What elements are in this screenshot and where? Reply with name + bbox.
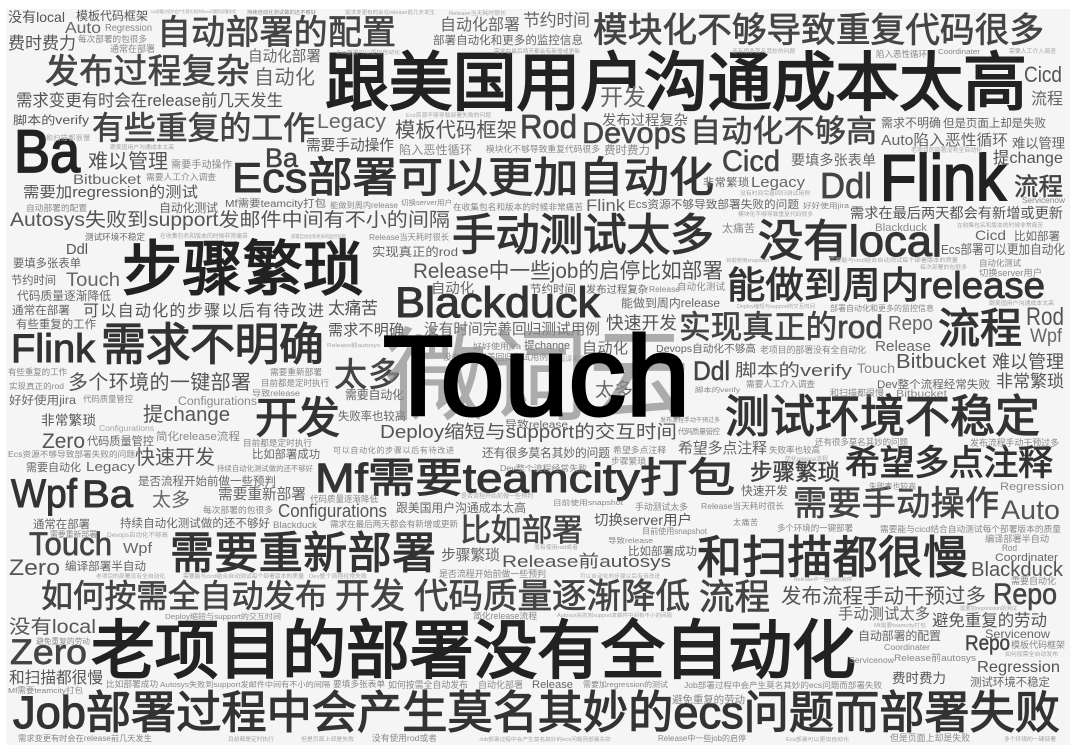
small keywords: Configurations bbox=[99, 424, 154, 433]
word: Cicd: Cicd bbox=[722, 145, 780, 178]
small keywords: 模块化不够导致重复代码很多 bbox=[486, 143, 600, 154]
small keywords: Ecs资源不够导致部署失败的问题 bbox=[8, 449, 135, 459]
small keywords: 好好使用jira bbox=[9, 393, 77, 407]
small keywords: 需要自动化 bbox=[345, 388, 404, 402]
small keywords: Mf需要teamcity打包 bbox=[225, 197, 326, 210]
small keywords: Coordinater bbox=[938, 49, 981, 56]
small keywords: Wpf bbox=[123, 540, 153, 557]
small keywords: 自动化测试 bbox=[979, 258, 1021, 268]
word: 没有local: 没有local bbox=[758, 217, 942, 266]
small keywords: 老项目的部署没有全自动化 bbox=[96, 572, 165, 580]
word: Ba lower: Ba bbox=[82, 474, 134, 516]
small keywords: 实现真正的rod bbox=[9, 381, 64, 391]
small keywords: 快速开发 bbox=[741, 484, 788, 498]
small keywords: 提change bbox=[993, 149, 1063, 167]
small keywords: 希望多点注释 bbox=[678, 440, 767, 457]
word: 老项目的部署没有全自动化: 老项目的部署没有全自动化 bbox=[91, 615, 856, 687]
small keywords: 切换server用户 bbox=[594, 512, 692, 528]
small keywords: Ecs资源不够导致部署失败的问题 bbox=[628, 197, 799, 211]
small keywords: 希望多点注释 bbox=[613, 444, 666, 455]
small keywords: 节约时间 bbox=[11, 273, 56, 287]
small keywords: 需求不明确 bbox=[328, 322, 404, 339]
small keywords: Servicenow bbox=[985, 627, 1050, 641]
small keywords: 发布流程手动干预过多 bbox=[970, 437, 1059, 448]
small keywords: 难以管理 bbox=[1012, 136, 1065, 151]
small keywords: 多个环境的一键部署 bbox=[68, 371, 251, 394]
small keywords: 没有使用rod或者 bbox=[372, 733, 437, 743]
small keywords: 发布流程手动干预过多 bbox=[781, 585, 986, 608]
small keywords: 陷入恶性循环 bbox=[876, 49, 927, 59]
small keywords: 需要加regression的测试 bbox=[23, 184, 198, 201]
small keywords: 跟美国用户沟通成本太高 bbox=[110, 143, 174, 151]
small keywords: Touch bbox=[66, 270, 120, 291]
word: 和扫描都很慢: 和扫描都很慢 bbox=[697, 532, 968, 583]
word: Touch center: Touch bbox=[383, 313, 690, 439]
small keywords: 流程 bbox=[1014, 173, 1063, 201]
small keywords: Ba bbox=[265, 143, 299, 173]
small keywords: 部署自动化和更多的监控信息 bbox=[291, 233, 346, 240]
small keywords: 费时费力 bbox=[604, 144, 650, 157]
word: Ba: Ba bbox=[14, 118, 81, 185]
word: Flink: Flink bbox=[880, 141, 1006, 214]
small keywords: 但是页面上却是失败 bbox=[301, 735, 354, 743]
word: Ddl: Ddl bbox=[820, 165, 872, 206]
watermark: 微词云: 微词云 bbox=[385, 320, 690, 434]
small keywords: 自动化 bbox=[582, 340, 628, 357]
small keywords: 快速开发 bbox=[606, 313, 677, 333]
small keywords: 模板代码框架 bbox=[395, 119, 517, 142]
small keywords: Ddl bbox=[66, 241, 88, 258]
small keywords: 在收集包名和版本的时候非常痛苦 bbox=[160, 232, 248, 240]
small keywords: 和扫描都很慢 bbox=[9, 669, 103, 687]
small keywords: 需要自动化 bbox=[1011, 575, 1056, 586]
small keywords: Deploy缩短与support的交互时间 bbox=[165, 611, 281, 621]
small keywords: 自动化测试 bbox=[159, 200, 218, 215]
word: Devops: Devops bbox=[582, 117, 686, 150]
small keywords: 没有时间完善回归测试用例 bbox=[424, 321, 600, 338]
small keywords: 失败率也较高 bbox=[338, 409, 406, 423]
small keywords: 步骤繁琐 bbox=[441, 546, 500, 564]
small keywords: 没有local bbox=[8, 9, 65, 25]
small keywords: Legacy bbox=[317, 111, 386, 133]
small keywords: 持续自动化测试做的还不够好 bbox=[217, 464, 314, 473]
small keywords: Release bbox=[649, 285, 681, 294]
small keywords: 手动测试太多 bbox=[635, 501, 688, 512]
small keywords: Deploy缩短与support的交互时间 bbox=[380, 422, 677, 442]
small keywords: Devops自动化不够高 bbox=[107, 531, 168, 539]
small keywords: Autosys失败到support发邮件中间有不小的间隔 bbox=[557, 611, 672, 619]
small keywords: 节约时间 bbox=[530, 282, 576, 296]
small keywords: 模板代码框架 bbox=[1011, 639, 1065, 650]
small keywords: 有些重复的工作 bbox=[16, 317, 96, 331]
small keywords: 太多 bbox=[152, 489, 190, 511]
small keywords: 代码质量逐渐降低 bbox=[310, 494, 378, 504]
small keywords: 代码质量逐渐降低 bbox=[17, 289, 111, 303]
small keywords: 需要加regression的测试 bbox=[960, 605, 1017, 612]
small keywords: Ecs资源不够导致部署失败的问题 bbox=[406, 111, 492, 119]
word: 自动化不够高: 自动化不够高 bbox=[690, 114, 877, 149]
word: 比如部署: 比如部署 bbox=[460, 513, 583, 548]
small keywords: 自动化测试 bbox=[677, 281, 725, 293]
word: 希望多点注释: 希望多点注释 bbox=[845, 444, 1053, 483]
small keywords: Servicenow bbox=[1022, 196, 1065, 205]
small keywords: Blackduck bbox=[875, 222, 928, 234]
small keywords: Repo bbox=[965, 632, 1010, 655]
small keywords: 需要重新部署 bbox=[50, 529, 97, 539]
word: Wpf: Wpf bbox=[11, 472, 78, 516]
word: Repo: Repo bbox=[993, 578, 1057, 611]
small keywords: Bitbucket bbox=[73, 171, 141, 187]
small keywords: 每次部署的包很多 bbox=[203, 504, 273, 515]
small keywords: 目前都是定时执行 bbox=[243, 437, 312, 448]
small keywords: 要填多张表单 bbox=[13, 256, 81, 270]
small keywords: 手动测试太多 bbox=[838, 606, 930, 623]
small keywords: 还有很多莫名其妙的问题 bbox=[482, 446, 610, 460]
word: 需要重新部署: 需要重新部署 bbox=[170, 529, 436, 578]
small keywords: Cicd bbox=[1024, 62, 1062, 87]
small keywords: Deploy缩短与support的交互时间 bbox=[737, 303, 815, 310]
small keywords: 避免重复的劳动 bbox=[672, 693, 745, 706]
small keywords: 在收集包名和版本的时候非常痛苦 bbox=[957, 221, 1043, 229]
small keywords: 没有时间完善回归测试用例 bbox=[740, 189, 810, 197]
small keywords: Coordinater bbox=[995, 552, 1058, 564]
small keywords: 要填多张表单 bbox=[791, 152, 876, 168]
small keywords: 发布过程复杂 bbox=[586, 283, 648, 296]
word: 步骤繁琐: 步骤繁琐 bbox=[122, 236, 363, 303]
small keywords: 难以管理 bbox=[88, 150, 168, 173]
word: 流程: 流程 bbox=[938, 305, 1022, 352]
small keywords: Release中一些job的启停 bbox=[794, 575, 852, 583]
small keywords: 需要自动化 bbox=[26, 460, 81, 474]
small keywords: 需求在最后两天都会有新增或更新 bbox=[494, 47, 580, 55]
small keywords: Touch bbox=[857, 360, 895, 376]
word: 手动测试太多: 手动测试太多 bbox=[452, 211, 714, 260]
small keywords: 可以自动化的步骤以后有待改进 bbox=[333, 445, 454, 455]
small keywords: 切换server用户 bbox=[401, 198, 452, 207]
small keywords: 自动化部署 bbox=[248, 48, 321, 65]
small keywords: 部署自动化和更多的监控信息 bbox=[830, 303, 934, 313]
small keywords: Dev整个流程经常失败 bbox=[500, 463, 587, 473]
word: 模块化不够导致重复代码很多: 模块化不够导致重复代码很多 bbox=[593, 11, 1044, 50]
small keywords: 导致release bbox=[505, 418, 569, 431]
small keywords: 导致release bbox=[252, 388, 301, 398]
small keywords: 要填多张表单 bbox=[333, 678, 385, 689]
small keywords: 简化release流程 bbox=[156, 429, 240, 443]
small keywords: Regression bbox=[1000, 481, 1064, 493]
small keywords: 实现真正的rod bbox=[372, 244, 458, 259]
small keywords: Dev整个流程经常失败 bbox=[877, 377, 990, 391]
word: Mf需要teamcity打包: Mf需要teamcity打包 bbox=[315, 455, 735, 501]
small keywords: Blackduck bbox=[971, 559, 1064, 581]
small keywords: 没有local bbox=[9, 616, 96, 638]
small keywords: 比如部署成功 bbox=[252, 447, 320, 461]
word: 能做到周内release: 能做到周内release bbox=[727, 265, 1045, 306]
small keywords: 脚本的verify bbox=[695, 385, 741, 394]
small keywords: 但是页面上却是失败 bbox=[943, 116, 1046, 130]
small keywords: Auto bbox=[1001, 495, 1060, 525]
small keywords: 多个环境的一键部署 bbox=[777, 523, 853, 533]
small keywords: Repo bbox=[888, 313, 933, 335]
small keywords: Configurations bbox=[178, 396, 257, 408]
small keywords: 需要能与cicd结合自动测试每个部署版本的质量 bbox=[880, 524, 1061, 534]
small keywords: 老项目的部署没有全自动化 bbox=[760, 344, 866, 355]
word: 开发: 开发 bbox=[255, 395, 340, 443]
small keywords: 流程 bbox=[1031, 90, 1063, 108]
small keywords: 模块化不够导致重复代码很多 bbox=[738, 210, 813, 218]
small keywords: 导致release bbox=[608, 535, 653, 545]
small keywords: 目前使用snapshot bbox=[642, 526, 708, 536]
small keywords: 是否流程开始前做一些预判 bbox=[439, 568, 546, 579]
small keywords: Flink bbox=[586, 196, 626, 215]
small keywords: 自动部署的配置 bbox=[26, 202, 87, 213]
small keywords: 和扫描都很慢 bbox=[46, 133, 90, 142]
small keywords: Release当天耗时很长 bbox=[449, 9, 507, 17]
small keywords: Mf需要teamcity打包 bbox=[8, 685, 83, 695]
small keywords: 比如部署成功 bbox=[106, 678, 158, 689]
small keywords: 太痛苦 bbox=[722, 221, 755, 235]
small keywords: 编译部署半自动 bbox=[985, 533, 1049, 544]
small keywords: Release前autosys bbox=[894, 652, 977, 663]
small keywords: 可以自动化的步骤以后有待改进 bbox=[580, 572, 661, 580]
small keywords: 需要手动操作 bbox=[306, 137, 394, 154]
small keywords: Autosys失败到support发邮件中间有不小的间隔 bbox=[160, 679, 331, 689]
small keywords: 需求变更有时会在release前几天发生 bbox=[18, 733, 152, 743]
small keywords: Legacy bbox=[86, 459, 136, 474]
word: 代码质量逐渐降低: 代码质量逐渐降低 bbox=[414, 578, 690, 616]
word: 需要手动操作: 需要手动操作 bbox=[793, 485, 999, 523]
small keywords: 需求变更有时会在release前几天发生 bbox=[345, 9, 435, 16]
small keywords: 目前都是定时执行 bbox=[228, 735, 274, 743]
small keywords: 每次部署的包很多 bbox=[920, 263, 967, 271]
small keywords: Rod bbox=[1002, 543, 1017, 553]
word: 有些重复的工作: 有些重复的工作 bbox=[92, 110, 315, 146]
small keywords: 有些重复的工作 bbox=[8, 367, 67, 377]
small keywords: 比如部署 bbox=[1014, 229, 1060, 243]
small keywords: 比如部署成功 bbox=[628, 544, 697, 558]
small keywords: Blackduck bbox=[273, 520, 318, 530]
small keywords: Job部署过程中会产生莫名其妙的ecs问题而部署失败 bbox=[150, 8, 236, 14]
small keywords: 可以自动化的步骤以后有待改进 bbox=[83, 302, 324, 320]
small keywords: 好好使用jira bbox=[803, 201, 849, 210]
small keywords: Release中一些job的启停比如部署 bbox=[413, 260, 723, 283]
word: 如何按需全自动发布: 如何按需全自动发布 bbox=[41, 578, 327, 614]
small keywords: Release当天耗时很长 bbox=[701, 501, 785, 511]
small keywords: 没有使用rod或者 bbox=[534, 543, 579, 551]
small keywords: 节约时间 bbox=[523, 11, 590, 30]
small keywords: 需要人工介入调查 bbox=[746, 378, 815, 389]
small keywords: 持续自动化测试做的还不够好 bbox=[247, 8, 317, 16]
small keywords: 如何按需全自动发布 bbox=[1005, 650, 1058, 658]
word: 测试环境不稳定: 测试环境不稳定 bbox=[725, 391, 1040, 442]
small keywords: 脚本的verify bbox=[13, 113, 89, 127]
small keywords: 需要手动操作 bbox=[171, 158, 232, 171]
word: Touch left: Touch bbox=[29, 526, 112, 562]
small keywords: 需要能与cicd结合自动测试每个部署版本的质量 bbox=[183, 572, 305, 580]
small keywords: Release前autosys bbox=[327, 341, 380, 349]
small keywords: 需求变更有时会在release前几天发生 bbox=[16, 91, 283, 110]
small keywords: 自动化部署 bbox=[478, 679, 523, 690]
small keywords: Bitbucket bbox=[896, 351, 986, 373]
small keywords: Zero bbox=[42, 430, 85, 453]
small keywords: 没有时间完善回归测试用例 bbox=[443, 351, 548, 362]
small keywords: 避免重复的劳动 bbox=[36, 636, 90, 646]
small keywords: 编译部署半自动 bbox=[558, 354, 608, 363]
small keywords: Rod bbox=[520, 108, 577, 145]
small keywords: 需要重新部署 bbox=[270, 366, 322, 377]
small keywords: 能做到周内release bbox=[330, 200, 399, 210]
small keywords: 目前使用snapshot bbox=[726, 257, 770, 264]
small keywords: Release bbox=[875, 338, 931, 355]
small keywords: 模板代码框架 bbox=[76, 9, 148, 23]
small keywords: 每次部署的包很多 bbox=[78, 33, 147, 44]
small keywords: 难以管理 bbox=[992, 352, 1064, 372]
small keywords: 通常在部署 bbox=[110, 43, 155, 54]
small keywords: 提change bbox=[524, 339, 570, 352]
small keywords: 快速开发 bbox=[135, 446, 215, 469]
small keywords: 需要重新部署 bbox=[218, 486, 306, 503]
small keywords: Job部署过程中会产生莫名其妙的ecs问题而部署失败 bbox=[479, 736, 611, 743]
small keywords: Mf需要teamcity打包 bbox=[874, 622, 926, 629]
small keywords: Autosys失败到support发邮件中间有不小的间隔 bbox=[10, 209, 450, 231]
small keywords: 失败率也较高 bbox=[869, 481, 916, 491]
small keywords: 好好使用jira bbox=[473, 341, 522, 351]
small keywords: 避免重复的劳动 bbox=[932, 612, 1047, 630]
small keywords: 自动部署的配置 bbox=[858, 628, 941, 643]
small keywords: 目前使用snapshot bbox=[553, 498, 623, 507]
small keywords: 但是页面上却是失败 bbox=[890, 732, 970, 743]
small keywords: 多个环境的一键部署 bbox=[1004, 735, 1056, 743]
small keywords: 太痛苦 bbox=[733, 517, 758, 527]
small keywords: 通常在部署 bbox=[33, 517, 90, 531]
small keywords: Release bbox=[532, 679, 573, 691]
word: Zero: Zero bbox=[10, 633, 87, 672]
small keywords: 是否流程开始前做一些预判 bbox=[138, 474, 276, 488]
word: Flink left: Flink bbox=[11, 327, 96, 371]
small keywords: 非常繁琐 bbox=[703, 175, 749, 189]
small keywords: Cicd bbox=[975, 227, 1006, 243]
small keywords: 自动化部署 bbox=[440, 16, 520, 34]
small keywords: Release前autosys bbox=[502, 552, 671, 571]
small keywords: 需求在最后两天都会有新增或更新 bbox=[330, 518, 458, 529]
small keywords: 还有很多莫名其妙的问题 bbox=[732, 47, 795, 55]
small keywords: 通常在部署 bbox=[12, 303, 70, 317]
small keywords: Ecs部署可以更加自动化 bbox=[941, 242, 1065, 257]
word: 发布过程复杂: 发布过程复杂 bbox=[45, 53, 250, 91]
small keywords: Bitbucket bbox=[896, 389, 947, 400]
word: 跟美国用户沟通成本太高: 跟美国用户沟通成本太高 bbox=[325, 47, 1027, 119]
small keywords: Servicenow bbox=[849, 656, 894, 665]
small keywords: Zero bbox=[9, 555, 60, 580]
small keywords: Coordinater bbox=[884, 643, 930, 652]
word: 太多: 太多 bbox=[334, 356, 401, 393]
small keywords: 开发 bbox=[600, 84, 646, 110]
small keywords: 脚本的verify bbox=[735, 361, 853, 380]
small keywords: 在收集包名和版本的时候非常痛苦 bbox=[453, 201, 583, 212]
small keywords: Auto陷入恶性循环 bbox=[881, 132, 1008, 149]
small keywords: 需求不明确 bbox=[881, 116, 941, 130]
small keywords: 需要人工介入调查 bbox=[146, 171, 216, 182]
small keywords: 测试环境不稳定 bbox=[970, 675, 1050, 689]
small keywords: 自动化 bbox=[431, 280, 474, 297]
small keywords: 代码质量管控 bbox=[83, 394, 134, 404]
small keywords: 费时费力 bbox=[892, 671, 946, 686]
word: Blackduck: Blackduck bbox=[395, 279, 601, 327]
small keywords: Regression bbox=[105, 23, 152, 34]
small keywords: 目前都是定时执行 bbox=[261, 378, 329, 388]
small keywords: 太痛苦 bbox=[328, 299, 378, 318]
small keywords: 如何按需全自动发布 bbox=[388, 679, 468, 690]
small keywords: 跟美国用户沟通成本太高 bbox=[396, 501, 526, 515]
small keywords: Ddl bbox=[693, 356, 730, 386]
small keywords: 代码质量管控 bbox=[87, 434, 154, 448]
small keywords: Ecs部署可以更加自动化 bbox=[337, 49, 400, 56]
small keywords: 失败率也较高 bbox=[769, 445, 820, 455]
small keywords: 步骤繁琐 bbox=[611, 455, 646, 466]
small keywords: 部署自动化和更多的监控信息 bbox=[433, 33, 583, 47]
small keywords: Dev整个流程经常失败 bbox=[309, 572, 368, 580]
word: Ecs部署可以更加自动化: Ecs部署可以更加自动化 bbox=[232, 154, 714, 201]
small keywords: 提change bbox=[143, 403, 230, 426]
small keywords: Configurations bbox=[278, 501, 387, 521]
small keywords: 能做到周内release bbox=[621, 296, 720, 310]
small keywords: Devops自动化不够高 bbox=[656, 342, 756, 355]
small keywords: 是否流程开始前做一些预判 bbox=[461, 492, 533, 500]
small keywords: Wpf bbox=[1030, 326, 1063, 347]
small keywords: Ecs部署可以更加自动化 bbox=[786, 735, 850, 743]
small keywords: Release当天耗时很长 bbox=[369, 232, 450, 242]
small keywords: 和扫描都很慢 bbox=[830, 387, 884, 398]
word: 开发 lower: 开发 bbox=[335, 577, 405, 616]
small keywords: 还有很多莫名其妙的问题 bbox=[815, 437, 908, 447]
small keywords: 需要能与cicd结合自动测试每个部署版本的质量 bbox=[829, 256, 958, 264]
small keywords: 编译部署半自动 bbox=[65, 559, 146, 573]
small keywords: 简化release流程 bbox=[785, 455, 828, 463]
small keywords: 步骤繁琐 bbox=[750, 460, 840, 485]
small keywords: 非常繁琐 bbox=[996, 372, 1064, 391]
small keywords: 需要加regression的测试 bbox=[583, 679, 669, 689]
small keywords: 费时费力 bbox=[8, 34, 76, 53]
word: 自动部署的配置: 自动部署的配置 bbox=[157, 14, 396, 52]
small keywords: 跟美国用户沟通成本太高 bbox=[989, 299, 1054, 307]
small keywords: Job部署过程中会产生莫名其妙的ecs问题而部署失败 bbox=[684, 680, 882, 690]
small keywords: 简化release流程 bbox=[473, 610, 537, 621]
word: Job部署过程: Job部署过程中会产生莫名其妙的ecs问题而部署失败 bbox=[13, 687, 1060, 738]
small keywords: 测试环境不稳定 bbox=[85, 231, 145, 242]
small keywords: 自动化 bbox=[254, 66, 315, 89]
word: 流程 lower: 流程 bbox=[699, 577, 770, 617]
small keywords: 需要人工介入调查 bbox=[1009, 47, 1056, 55]
small keywords: 持续自动化测试做的还不够好 bbox=[120, 516, 270, 530]
small keywords: Regression bbox=[977, 659, 1060, 676]
small keywords: 陷入恶性循环 bbox=[399, 142, 472, 157]
word: 实现真正的rod: 实现真正的rod bbox=[679, 309, 883, 345]
small keywords: 发布流程手动干预过多 bbox=[660, 416, 720, 424]
small keywords: 需求在最后两天都会有新增或更新 bbox=[850, 206, 1063, 222]
small keywords: 老项目的部署没有全自动化 bbox=[911, 146, 982, 154]
small keywords: Auto bbox=[65, 20, 101, 37]
small keywords: 太多 bbox=[595, 379, 633, 401]
small keywords: Legacy bbox=[751, 174, 806, 191]
small keywords: 非常繁琐 bbox=[41, 412, 96, 428]
small keywords: 切换server用户 bbox=[979, 267, 1042, 278]
small keywords: 发布过程复杂 bbox=[602, 111, 688, 129]
word: 需求不明确: 需求不明确 bbox=[101, 319, 324, 370]
small keywords: Release中一些job的启停 bbox=[658, 733, 746, 743]
small keywords: Rod bbox=[1026, 303, 1064, 331]
small keywords: 代码质量管控 bbox=[678, 426, 720, 436]
